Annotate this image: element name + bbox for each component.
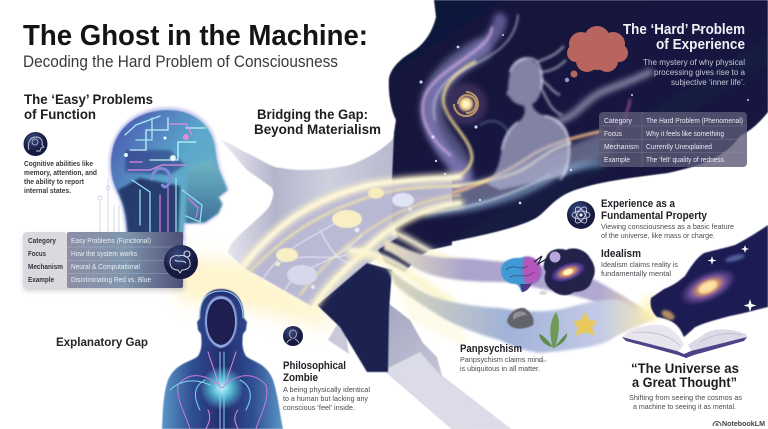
text: easy problems description: the ability to report xyxy=(24,177,84,186)
panel: easy problems table: Focus xyxy=(28,251,46,258)
text: experience as a fundamental property: of the universe, like mass or charge. xyxy=(601,231,715,240)
panel: easy problems table: Example xyxy=(28,277,54,284)
icon: zombie head xyxy=(283,326,303,346)
illustration: digital head in profile xyxy=(109,107,229,240)
text: panpsychism: Panpsychism claims mind xyxy=(460,355,543,364)
icon: head with brain xyxy=(24,132,48,156)
subtitle: Decoding the Hard Problem of Consciousness xyxy=(23,53,338,71)
heading: hard problem xyxy=(623,22,745,53)
text: easy problems description: internal states. xyxy=(24,186,71,195)
text: experience as a fundamental property xyxy=(601,198,734,240)
text: philosophical zombie: A being physically identical xyxy=(283,385,370,394)
panel: hard problem table: Why it feels like something xyxy=(646,131,724,138)
heading: universe as a great thought xyxy=(631,360,739,390)
text: philosophical zombie: Philosophical xyxy=(283,360,346,372)
panel: easy problems table xyxy=(23,232,184,290)
text: idealism xyxy=(601,248,678,278)
ribbon: stream to panpsychism xyxy=(387,267,655,353)
heading: universe as a great thought: a Great Thought” xyxy=(632,374,737,390)
illustration: ethereal ribbons around ghost xyxy=(395,15,650,213)
text: panpsychism: Panpsychism xyxy=(460,343,522,355)
panel: hard problem table: Example xyxy=(604,157,630,164)
text: universe description xyxy=(629,393,742,411)
text: idealism: Idealism xyxy=(601,248,641,260)
text: hard problem description xyxy=(643,58,746,87)
panel: easy problems table: Easy Problems (Functional) xyxy=(71,238,151,245)
logo: NotebookLM: NotebookLM xyxy=(722,419,765,428)
ribbon: stream to idealism xyxy=(384,238,655,322)
panel: easy problems table: How the system works xyxy=(71,251,137,258)
panel: hard problem table: Mechanism xyxy=(604,144,639,151)
heading: easy problems: of Function xyxy=(24,106,96,122)
illustration: brain and galaxy cloud xyxy=(501,248,595,295)
illustration: faceless body xyxy=(162,289,283,429)
text: experience as a fundamental property: Fundamental Property xyxy=(601,210,708,222)
illustration: thought bubbles on bridge xyxy=(276,188,414,289)
text: experience as a fundamental property: Experience as a xyxy=(601,198,676,210)
illustration: spiral galaxy in ribbons xyxy=(445,83,487,125)
text: universe description: Shifting from seeing the cosmos as xyxy=(629,393,742,402)
text: easy problems description: Cognitive abilities like xyxy=(24,159,93,168)
panel: easy problems table: Mechanism xyxy=(28,264,63,271)
heading: easy problems: The ‘Easy’ Problems xyxy=(24,91,153,107)
text: idealism: Idealism claims reality is xyxy=(601,260,678,269)
illustration: golden bridge ribbons xyxy=(243,177,460,307)
illustration: ghostly silhouette xyxy=(487,46,569,190)
heading: hard problem: of Experience xyxy=(656,37,745,53)
text: hard problem description: The mystery of why physical xyxy=(643,58,745,67)
illustration: twinkling stars xyxy=(419,29,749,204)
panel: easy problems table: Neural & Computational xyxy=(71,264,140,271)
icon: brain with gear xyxy=(164,245,198,279)
text: philosophical zombie xyxy=(283,360,370,412)
text: hard problem description: processing gives rise to a xyxy=(654,68,746,77)
decoration: grey cliff faces and chasm xyxy=(220,130,511,429)
heading: bridging the gap xyxy=(254,106,381,137)
text: philosophical zombie: to a human but lacking any xyxy=(283,394,368,403)
text: universe description: a machine to seeing it as mental. xyxy=(633,402,736,411)
panel: easy problems table: Category xyxy=(28,238,56,245)
text: experience as a fundamental property: Viewing consciousness as a basic feature xyxy=(601,222,734,231)
panel: hard problem table xyxy=(599,112,747,167)
panel: dark night sky region xyxy=(389,0,768,245)
panel: hard problem table: The Hard Problem (Phenomenal) xyxy=(646,118,743,125)
text: easy problems description xyxy=(24,159,97,195)
text: easy problems description: memory, attention, and xyxy=(24,168,97,177)
icon: atom xyxy=(567,201,595,229)
icon: thought cloud xyxy=(565,26,628,82)
panel: hard problem table: The ‘felt’ quality of redness xyxy=(646,157,724,164)
illustration: rock, plant and star xyxy=(507,291,597,362)
text: panpsychism: is ubiquitous in all matter. xyxy=(460,364,540,373)
text: philosophical zombie: Zombie xyxy=(283,372,318,384)
heading: universe as a great thought: “The Universe as xyxy=(631,360,739,376)
heading: hard problem: The ‘Hard’ Problem xyxy=(623,22,745,38)
panel: hard problem table: Currently Unexplained xyxy=(646,144,712,151)
panel: hard problem table: Focus xyxy=(604,131,622,138)
heading: easy problems xyxy=(24,91,153,122)
panel: easy problems table: Discriminating Red vs. Blue xyxy=(71,277,151,284)
label: explanatory gap: Explanatory Gap xyxy=(56,337,148,349)
text: philosophical zombie: conscious ‘feel’ inside. xyxy=(283,403,355,412)
title: The Ghost in the Machine: xyxy=(23,20,368,52)
panel: hard problem table: Category xyxy=(604,118,632,125)
text: idealism: fundamentally mental xyxy=(601,269,671,278)
decoration: circuit traces beside head xyxy=(98,178,119,232)
illustration: open book with galaxy xyxy=(622,225,768,358)
text: hard problem description: subjective ‘inner life’. xyxy=(671,78,745,87)
decoration: cream glow under bridge xyxy=(160,255,470,350)
heading: bridging the gap: Beyond Materialism xyxy=(254,121,381,137)
heading: bridging the gap: Bridging the Gap: xyxy=(257,106,368,122)
text: panpsychism xyxy=(460,343,543,373)
